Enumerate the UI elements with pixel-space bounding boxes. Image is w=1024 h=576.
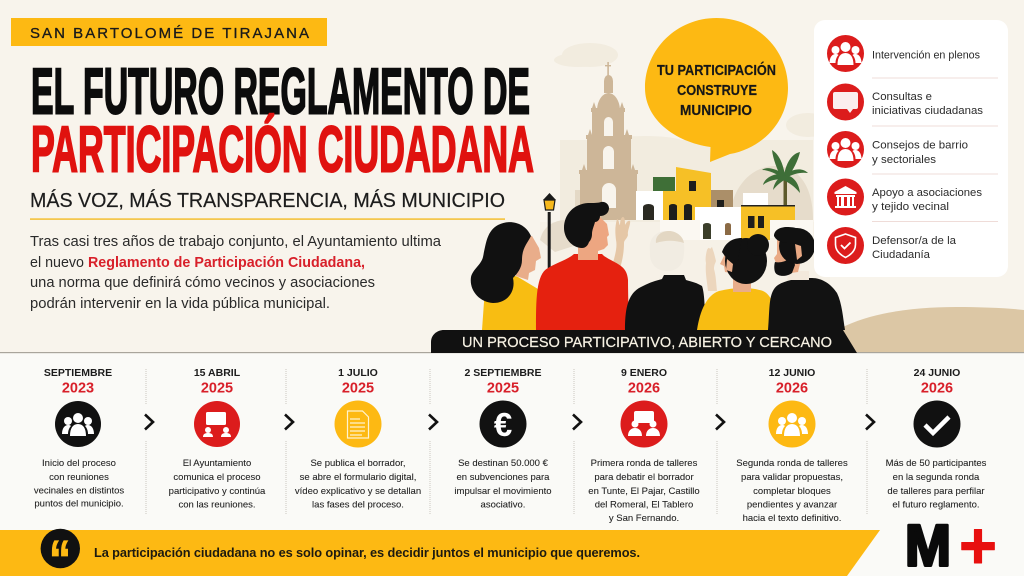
step: 24 junio 2026: el futuro reglamento. [892,500,980,510]
icon: euro [480,400,526,448]
step: 12 junio 2026: hacia el texto definitivo. [743,513,841,524]
quote band [0,529,880,576]
top background [0,0,1024,352]
step: 24 junio 2026 [886,367,987,510]
icon: consultas [827,84,864,120]
banner [431,330,857,353]
icon: workshop chat [620,400,668,448]
step: 2 septiembre 2025 [454,367,552,510]
logo: M+ [905,508,997,576]
subtitle: MÁS VOZ, MÁS TRANSPARENCIA, MÁS MUNICIPIO [30,189,505,212]
step: 9 enero 2026: del Romeral, El Tablero [595,500,693,510]
illustration: houses [636,167,813,240]
label: consejos [872,140,968,166]
label: asociaciones: Apoyo a asociaciones [872,187,982,199]
bottom background [0,353,1024,576]
label: defensor: Defensor/a de la [872,235,957,247]
label: consejos: Consejos de barrio [872,140,968,152]
step: septiembre 2023: con reuniones [49,472,109,483]
illustration: town backdrop [540,43,830,302]
step: 15 abril 2025 [169,367,266,510]
step: 2 septiembre 2025: impulsar el movimiento [454,486,552,497]
step: 24 junio 2026: de talleres para perfilar [887,486,985,497]
step: 15 abril 2025: participativo y continúa [169,486,266,497]
speech bubble [645,18,788,162]
step: septiembre 2023: vecinales en distintos [34,486,124,496]
step: 12 junio 2026: 12 JUNIO [769,367,815,379]
illustration: palm tree [762,150,808,220]
step: 9 enero 2026: 9 ENERO [621,367,667,379]
label: consultas: iniciativas ciudadanas [872,105,983,117]
step: 1 julio 2025: Se publica el borrador, [310,458,406,469]
title: EL FUTURO REGLAMENTO DE [31,54,530,128]
step: 1 julio 2025: 1 JULIO [338,367,378,379]
hand raised second [706,247,717,291]
step: 1 julio 2025: vídeo explicativo y se detallan [295,486,421,497]
icon: shield [827,227,864,264]
label: asociaciones: y tejido vecinal [872,201,949,213]
step: 9 enero 2026: y San Fernando. [609,513,679,524]
hill [841,307,1024,352]
banner: UN PROCESO PARTICIPATIVO, ABIERTO Y CERCANO [462,335,832,351]
step: 15 abril 2025: con las reuniones. [178,500,256,510]
person: man in red shirt [536,202,628,330]
step: 24 junio 2026: en la segunda ronda [893,472,980,483]
step: 9 enero 2026: en Tunte, El Pajar, Castillo [588,486,700,497]
step: 1 julio 2025: se abre el formulario digital, [300,472,416,483]
icon: euro: € [494,406,512,443]
step: 9 enero 2026 [588,367,700,524]
intro text: podrán intervenir en la vida pública municipal. [30,296,330,312]
person: woman with long hair [471,222,541,330]
icon: quote [41,529,80,576]
icon: chat group [194,401,240,447]
step: 12 junio 2026: Segunda ronda de talleres [736,458,848,469]
icon: yellow group [768,400,816,448]
step: 15 abril 2025: comunica el proceso [173,472,261,483]
icon: plenary [827,35,864,72]
step: 15 abril 2025: El Ayuntamiento [183,458,251,469]
icon: check [914,400,960,448]
step: 12 junio 2026 [736,367,848,524]
step: 2 septiembre 2025: Se destinan 50.000 € [458,458,549,469]
step: septiembre 2023: Inicio del proceso [42,458,116,469]
hand raised [611,217,630,271]
step: 9 enero 2026: Primera ronda de talleres [591,458,698,469]
illustration: church [579,62,638,220]
step: 12 junio 2026: completar bloques [753,486,831,497]
intro text [30,234,442,312]
label: consultas [872,91,983,117]
person: man with beard [768,227,845,330]
step: 1 julio 2025: las fases del proceso. [312,500,404,510]
speech bubble: TU PARTICIPACIÓN [657,61,776,79]
step: 1 julio 2025 [295,367,421,510]
step: 24 junio 2026: 2026 [921,380,953,396]
step: septiembre 2023: SEPTIEMBRE [44,367,112,379]
title: PARTICIPACIÓN CIUDADANA [31,112,534,186]
label: plenos: Intervención en plenos [872,50,980,62]
people group [471,202,845,330]
step: 2 septiembre 2025: 2 SEPTIEMBRE [464,367,542,379]
step: septiembre 2023: puntos del municipio. [34,498,124,510]
icon: asociaciones building [827,178,864,216]
label: asociaciones [872,187,982,213]
person: older man with white hair [625,231,705,330]
step: 2 septiembre 2025: 2025 [487,380,519,396]
speech bubble: CONSTRUYE [677,82,757,99]
person: woman with hair bun [697,234,778,330]
title [31,54,534,186]
step: 9 enero 2026: para debatir el borrador [594,472,694,483]
speech bubble: MUNICIPIO [680,102,752,119]
step: 12 junio 2026: para validar propuestas, [741,472,843,483]
step: 15 abril 2025: 15 ABRIL [194,367,241,379]
timeline dividers [146,369,867,514]
intro text: Tras casi tres años de trabajo conjunto, el Ayuntamiento ultima [30,234,442,250]
label: consultas: Consultas e [872,91,932,103]
icon: consejos [827,131,864,168]
timeline arrows [145,414,874,430]
icon: document [334,400,382,448]
tag: San Bartolomé de Tirajana: SAN BARTOLOMÉ DE TIRAJANA [30,25,309,42]
label: defensor: Ciudadanía [872,249,931,261]
step: septiembre 2023: 2023 [62,380,94,396]
step: 24 junio 2026: 24 JUNIO [914,367,960,379]
intro text: el nuevo Reglamento de Participación Ciudadana, [30,255,365,271]
tag: San Bartolomé de Tirajana [11,18,327,46]
step: 2 septiembre 2025: asociativo. [481,500,525,510]
step: 2 septiembre 2025: en subvenciones para [457,472,550,483]
step: 24 junio 2026: Más de 50 participantes [886,458,987,469]
step: septiembre 2023 [34,367,124,510]
step: 12 junio 2026: pendientes y avanzar [747,500,837,510]
street lamp [543,193,556,272]
label: consejos: y sectoriales [872,154,936,166]
icon: group [55,401,101,447]
intro text: una norma que definirá cómo vecinos y asociaciones [30,275,375,291]
label: defensor [872,235,957,261]
step: 12 junio 2026: 2026 [776,380,808,396]
panel: participation channels [814,20,1008,277]
step: 9 enero 2026: 2026 [628,380,660,396]
step: 15 abril 2025: 2025 [201,380,233,396]
step: 1 julio 2025: 2025 [342,380,374,396]
quote band: La participación ciudadana no es solo opinar, es decidir juntos el municipio que queremos. [94,545,640,560]
